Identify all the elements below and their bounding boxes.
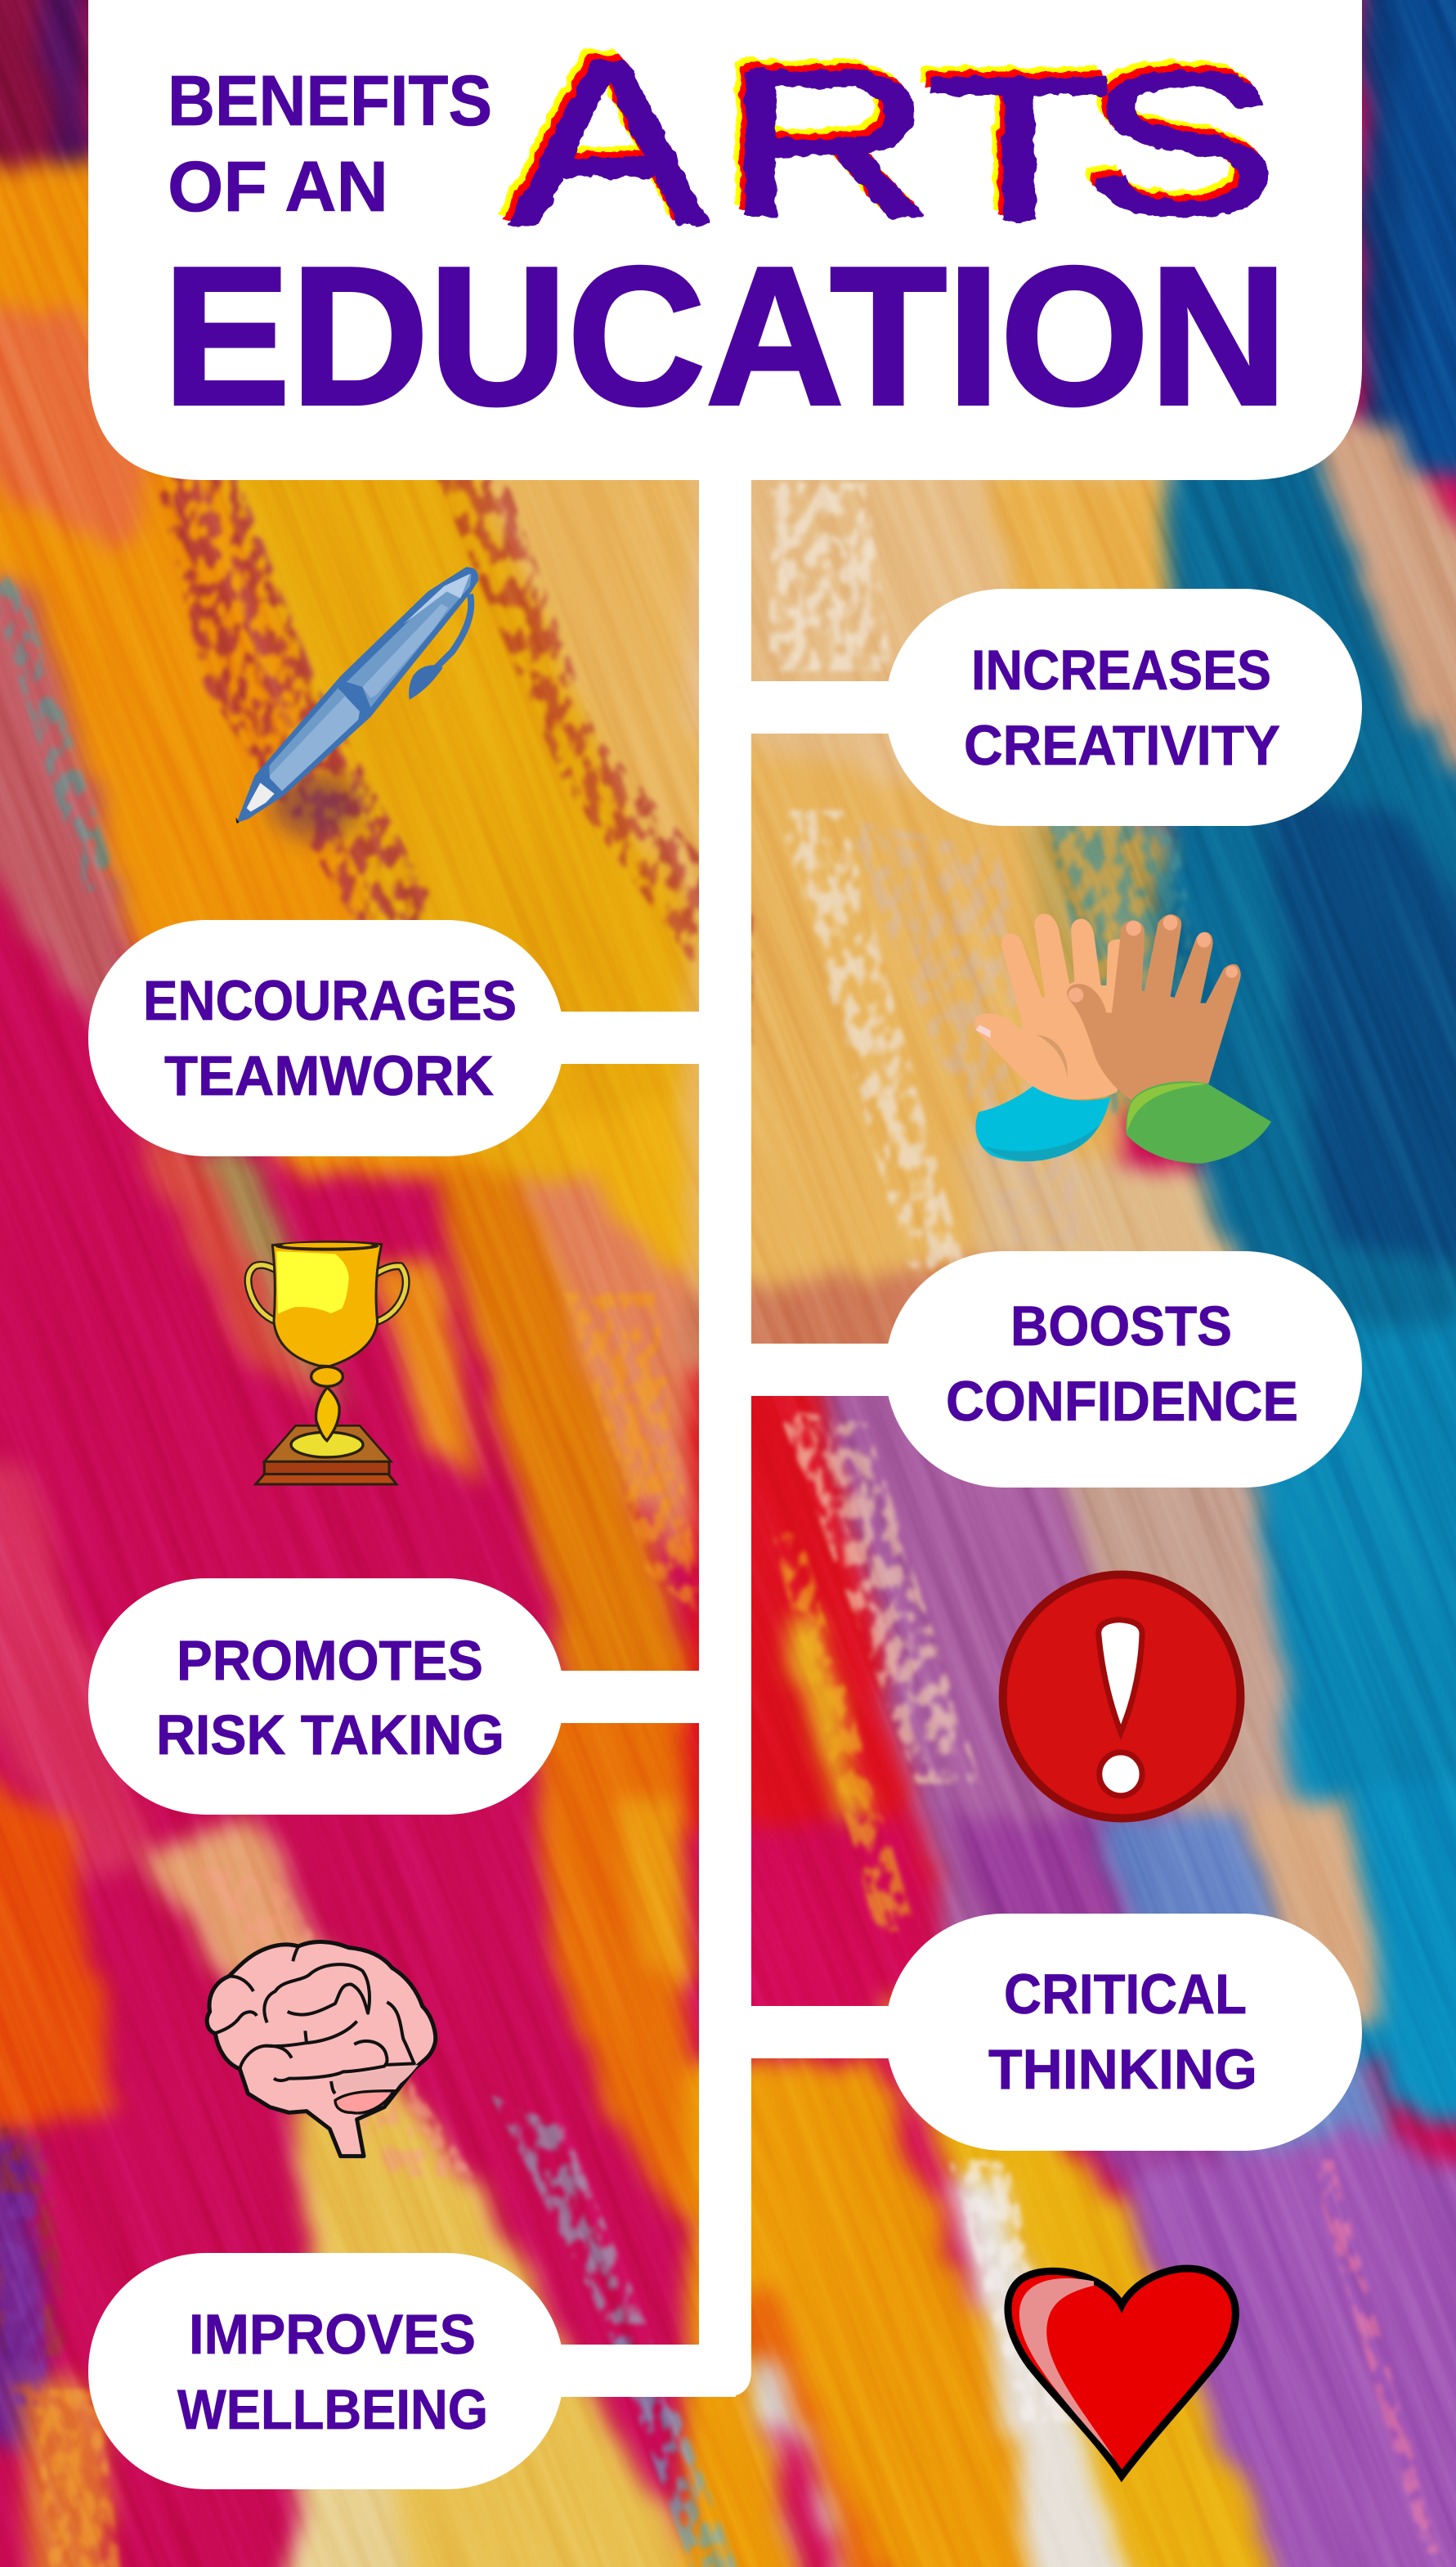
icon: pen [235,567,478,824]
icon: brain [207,1942,436,2156]
callout: improves wellbeing: IMPROVES [189,2303,476,2366]
callout: improves wellbeing [88,2253,736,2489]
callout: encourages teamwork: TEAMWORK [164,1044,494,1107]
heading: arts, hand-lettered with yellow and red shadow: T [925,34,1113,263]
title panel [88,0,1362,480]
icon: trophy [248,1241,406,1484]
callout: promotes risk taking [88,1578,736,1815]
callout: critical thinking: CRITICAL [1004,1963,1247,2026]
callout: boosts confidence: CONFIDENCE [946,1370,1298,1433]
icon: high five hands [974,913,1271,1164]
heading: arts, hand-lettered with yellow and red shadow: S [1084,29,1280,258]
callout: encourages teamwork: ENCOURAGES [143,969,517,1032]
callout: increases creativity: CREATIVITY [964,714,1280,777]
vertical connector line [699,474,751,2397]
heading: benefits of an: BENEFITS [168,61,492,141]
callout: boosts confidence [719,1251,1362,1488]
callout: increases creativity [719,589,1362,826]
callout: critical thinking [719,1914,1362,2151]
heading: benefits of an [168,61,492,227]
callout: promotes risk taking: RISK TAKING [156,1703,504,1766]
heading: benefits of an: OF AN [168,147,388,227]
callout: critical thinking: THINKING [988,2038,1257,2101]
decorative pen shadow on the painting [270,773,360,838]
callout: promotes risk taking: PROMOTES [177,1629,483,1692]
heading: arts, hand-lettered with yellow and red shadow: A [508,10,710,275]
callout: increases creativity: INCREASES [971,639,1271,702]
callout: encourages teamwork [88,920,736,1156]
callout: improves wellbeing: WELLBEING [177,2378,488,2441]
heading: arts, hand-lettered with yellow and red shadow: R [724,25,934,261]
icon: heart [1008,2269,1235,2476]
icon: exclamation mark [1003,1575,1240,1818]
heading: education: EDUCATION [163,227,1288,447]
heading: arts, hand-lettered with yellow and red shadow [508,10,1280,275]
callout: boosts confidence: BOOSTS [1010,1295,1232,1358]
